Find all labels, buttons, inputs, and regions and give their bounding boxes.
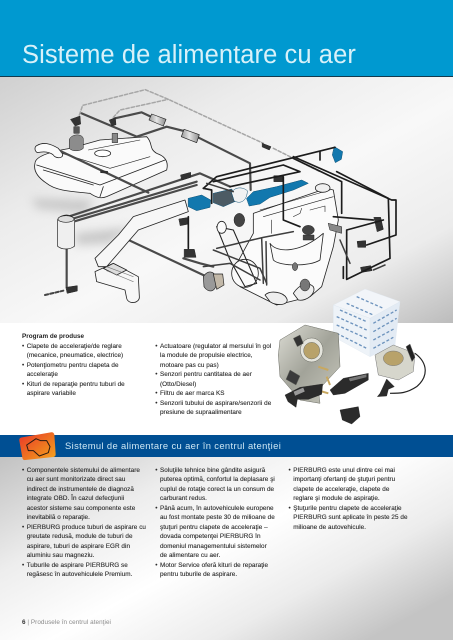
text column 3: importanţi ofertanţi de ştuţuri pentru [293, 476, 395, 483]
text column 1: inevitabilă o reparaţie. [27, 514, 90, 521]
fuel pump and sensors [66, 116, 383, 293]
text column 2: cuplul de rotaţie corect la un consum de [160, 486, 274, 493]
vacuum dashed lines [45, 90, 320, 295]
text column 3: clapete de acceleraţie, clapete de [293, 486, 389, 493]
text column 2: Până acum, în autovehiculele europene [160, 505, 274, 512]
text column 3: milioane de autovehicule. [293, 524, 366, 531]
products list left: acceleraţie [27, 371, 58, 378]
text column 1: indirect de instrumentele de diagnoză [27, 486, 134, 493]
products list right: Senzori pentru cantitatea de aer [160, 371, 252, 378]
electrical wiring [188, 147, 396, 279]
footer: 6 | Produsele în centrul atenţiei [22, 619, 111, 626]
text column 1: cu aer sunt monitorizate direct sau [27, 476, 125, 483]
products list left: Potenţiometru pentru clapeta de [27, 362, 119, 369]
text column 2: puterea optimă, confortul la deplasare şi [160, 476, 275, 483]
engine system diagram [32, 90, 396, 305]
text column 2: carburant redus. [160, 495, 207, 502]
fuel filters [57, 114, 224, 291]
text column 3: reglare şi module de aspiraţie. [293, 495, 380, 502]
text column 2: dovada competenţei PIERBURG în [160, 533, 261, 540]
products list right: la module de propulsie electrice, [160, 352, 253, 359]
products list right: motoare pas cu pas) [160, 362, 219, 369]
products list right: presiune de supraalimentare [160, 409, 242, 416]
parts box [333, 289, 400, 357]
products list right: (Otto/Diesel) [160, 381, 196, 388]
lower panel background [0, 457, 453, 640]
engine block [217, 184, 338, 305]
text column 1 [22, 466, 146, 578]
text column 3: Ştuţurile pentru clapete de acceleraţie [293, 505, 402, 512]
text column 3 [288, 466, 408, 531]
title: Sisteme de alimentare cu aer [22, 41, 356, 69]
text column 3: PIERBURG este unul dintre cei mai [293, 466, 395, 474]
products list left: Kituri de reparaţie pentru tuburi de [27, 381, 125, 388]
products list right [155, 342, 272, 416]
products heading: Program de produse [22, 333, 84, 340]
diagram background [0, 77, 453, 323]
text column 1: acestor sisteme sau componente este [27, 505, 135, 512]
section band [0, 435, 453, 457]
blue intake manifold and throttle [188, 147, 343, 211]
text column 2: Soluţiile tehnice bine gândite asigură [160, 466, 265, 474]
products list left: Clapete de acceleraţie/de reglare [27, 342, 122, 350]
air intake pipe [95, 200, 188, 303]
text column 1: aluminiu sau magneziu. [27, 552, 94, 559]
products list right: Filtru de aer marca KS [160, 390, 225, 397]
throttle body small [375, 344, 425, 393]
products list right: Actuatoare (regulator al mersului în gol [160, 342, 271, 350]
fuel hoses [62, 112, 251, 287]
text column 3: PIERBURG sunt aplicate în peste 25 de [293, 514, 408, 521]
header band [0, 0, 453, 76]
text column 2: de alimentare cu aer. [160, 552, 220, 559]
text column 1: greutate redusă, module de tuburi de [27, 533, 133, 540]
text column 1: aspirare, tuburi de aspirare EGR din [27, 543, 130, 550]
text column 1: PIERBURG produce tuburi de aspirare cu [27, 524, 146, 531]
parts photo [278, 289, 425, 424]
text column 2: Motor Service oferă kituri de reparaţie [160, 562, 268, 569]
text column 2: domeniul managementului sistemelor [160, 543, 267, 550]
alternator and pulleys [234, 213, 342, 291]
icon: engine warning light [19, 432, 56, 460]
text column 2: au fost montate peste 30 de milioane de [160, 514, 275, 521]
section heading: Sistemul de alimentare cu aer în centrul atenţiei [65, 440, 281, 451]
text column 2: pentru tuburile de aspirare. [160, 571, 237, 578]
text column 1: integrate OBD. În cazul defecţiunii [27, 495, 124, 502]
text column 1: Tuburile de aspirare PIERBURG se [27, 562, 128, 569]
products list right: Senzorii tubului de aspirare/senzorii de [160, 400, 271, 407]
products list left: (mecanice, pneumatice, electrice) [27, 352, 123, 359]
fuel tank [35, 137, 167, 198]
grey engine harness [203, 183, 385, 285]
soft floor shadows [32, 198, 133, 245]
products list left: aspirare variabile [27, 390, 76, 397]
text column 2: ştuţuri pentru clapete de acceleraţie – [160, 524, 268, 531]
products list left [22, 342, 125, 397]
sensors [285, 373, 394, 424]
text column 1: regăsesc în autovehiculele Premium. [27, 571, 132, 578]
throttle body large [278, 325, 340, 403]
text column 2 [155, 466, 275, 578]
text column 1: Componentele sistemului de alimentare [27, 466, 140, 474]
